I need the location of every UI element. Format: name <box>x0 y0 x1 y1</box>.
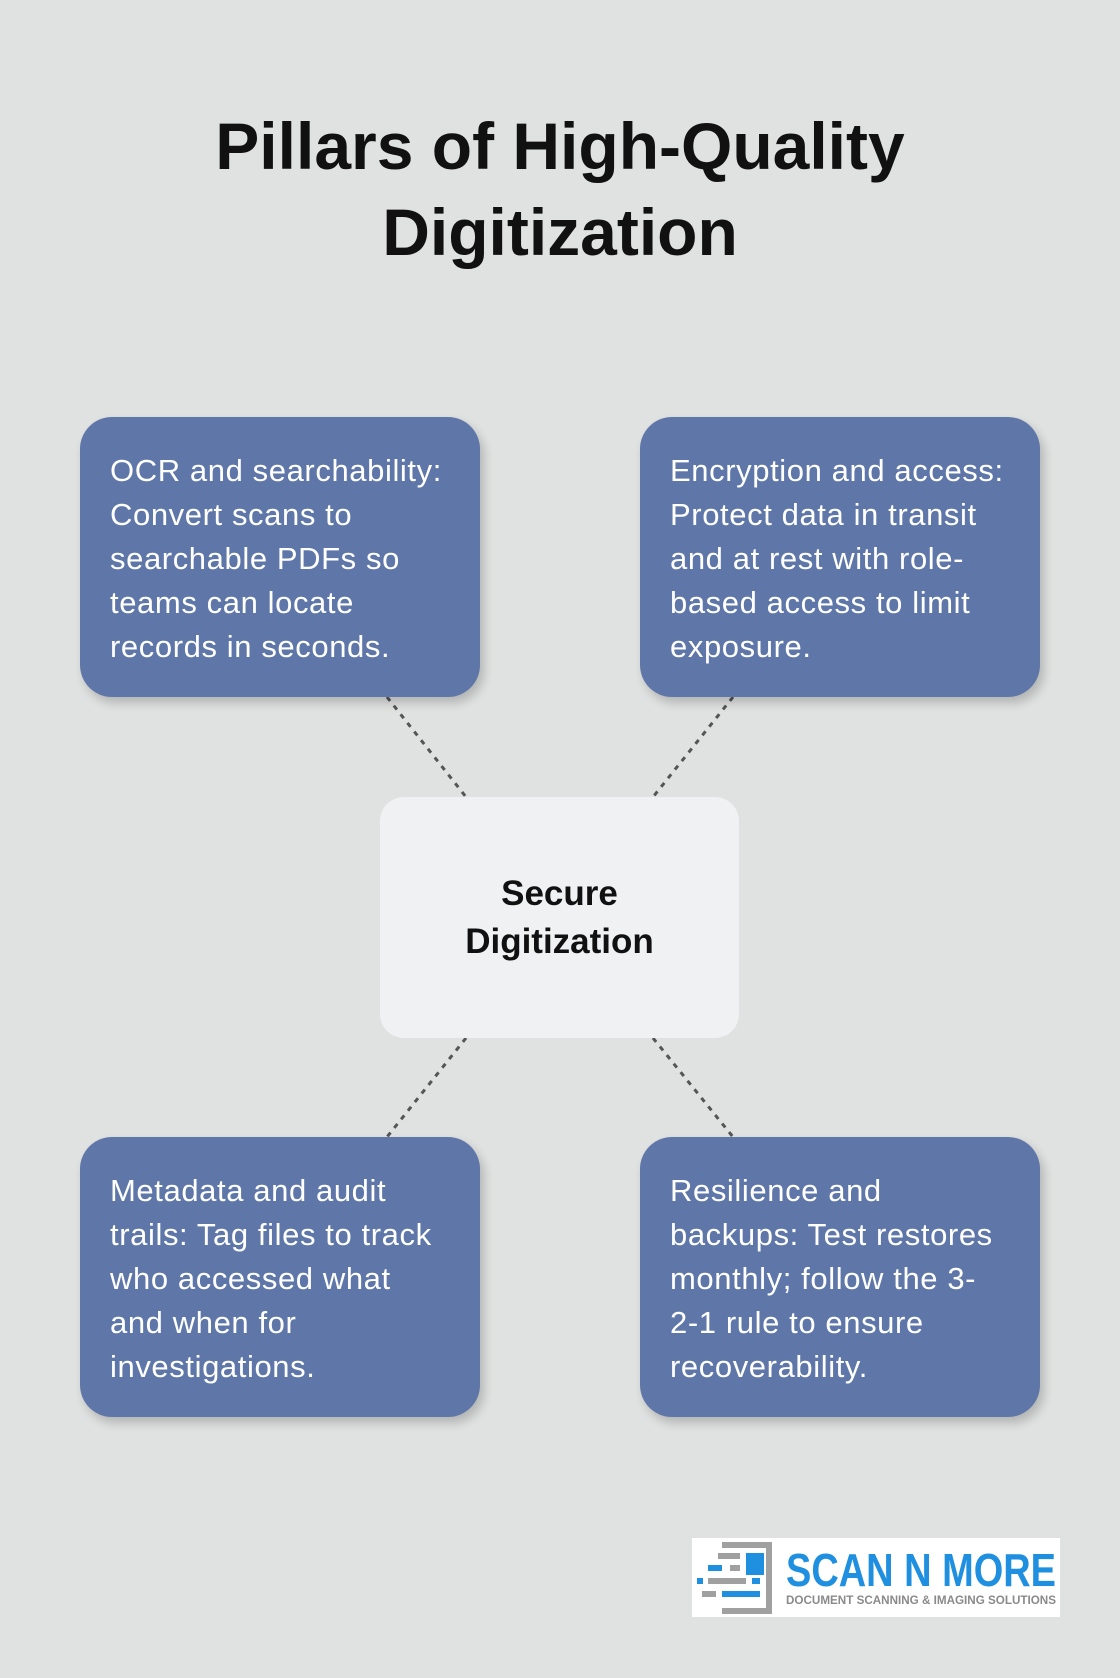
panel: OCR: teams can locate <box>110 585 354 620</box>
panel: OCR: OCR and searchability: <box>110 453 442 488</box>
panel: metadata: investigations. <box>110 1349 315 1384</box>
panel: encryption <box>640 417 1040 697</box>
panel: OCR: records in seconds. <box>110 629 390 664</box>
panel: encryption: and at rest with role- <box>670 541 964 576</box>
panel: metadata: trails: Tag files to track <box>110 1217 432 1252</box>
logo <box>692 1538 1060 1617</box>
panel: resilience: 2-1 rule to ensure <box>670 1305 924 1340</box>
panel: encryption: Protect data in transit <box>670 497 977 532</box>
panel: OCR: Convert scans to <box>110 497 352 532</box>
panel: metadata: Metadata and audit <box>110 1173 386 1208</box>
panel: metadata: and when for <box>110 1305 296 1340</box>
panel: encryption: based access to limit <box>670 585 970 620</box>
panel: resilience: backups: Test restores <box>670 1217 993 1252</box>
center node: Digitization <box>465 922 654 960</box>
center node: Secure <box>501 874 618 912</box>
panel: encryption: Encryption and access: <box>670 453 1004 488</box>
title <box>215 109 905 269</box>
logo: DOCUMENT SCANNING & IMAGING SOLUTIONS <box>786 1593 1056 1607</box>
panel: metadata <box>80 1137 480 1417</box>
panel: metadata: who accessed what <box>110 1261 391 1296</box>
center node <box>380 797 739 1038</box>
title: Digitization <box>382 195 738 269</box>
panel: encryption: exposure. <box>670 629 812 664</box>
panel: OCR <box>80 417 480 697</box>
panel: resilience: recoverability. <box>670 1349 868 1384</box>
panel: OCR: searchable PDFs so <box>110 541 400 576</box>
panel: resilience <box>640 1137 1040 1417</box>
panel: resilience: Resilience and <box>670 1173 882 1208</box>
panel: resilience: monthly; follow the 3- <box>670 1261 976 1296</box>
title: Pillars of High-Quality <box>215 109 905 183</box>
